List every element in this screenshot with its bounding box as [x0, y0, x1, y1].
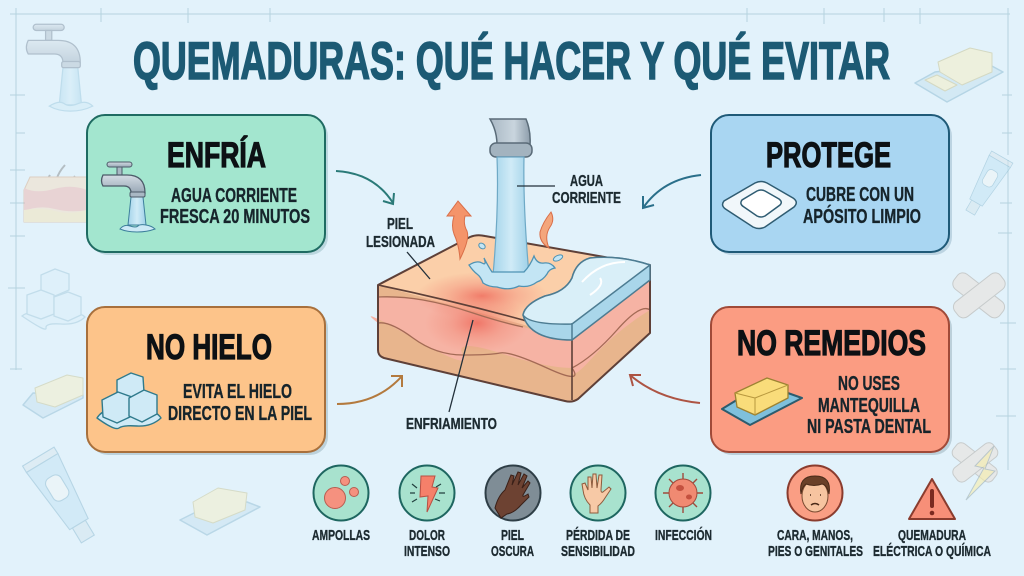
arrow: no hielo to skin — [337, 376, 402, 404]
label line: agua: AGUA — [570, 173, 603, 190]
gel layer — [523, 257, 650, 340]
background icon: butter bottom — [180, 488, 260, 535]
faucet spout — [490, 119, 532, 157]
icon: dressing — [723, 182, 796, 228]
label: sensibilidad: SENSIBILIDAD — [561, 544, 635, 560]
text: directo en la piel: DIRECTO EN LA PIEL — [168, 403, 312, 425]
arrow: enfría to skin — [336, 171, 394, 204]
icon: butter — [722, 378, 802, 425]
skin block — [371, 235, 650, 402]
background icon: lightning bolt — [966, 446, 995, 500]
heading: enfría: ENFRÍA — [167, 135, 266, 175]
panel: protege — [711, 115, 952, 255]
panel: enfría — [87, 115, 328, 255]
arrow: heat left — [447, 201, 471, 259]
label: infección: INFECCIÓN — [655, 526, 712, 544]
background icon: bandage upper — [950, 270, 1008, 321]
label line: corriente: CORRIENTE — [552, 190, 621, 207]
label line: piel: PIEL — [387, 216, 413, 233]
callout: agua corriente — [517, 173, 621, 207]
text: apósito limpio: APÓSITO LIMPIO — [803, 204, 921, 228]
text: cubre con un: CUBRE CON UN — [806, 184, 914, 206]
sign: dolor intenso — [400, 466, 454, 560]
icon: faucet — [102, 162, 155, 232]
sign: cara, manos, pies o genitales — [768, 466, 863, 560]
text: evita el hielo: EVITA EL HIELO — [183, 381, 292, 403]
background icon: toothpaste tube left — [23, 447, 104, 548]
label: cara, manos: CARA, MANOS, — [777, 528, 853, 544]
label: piel: PIEL — [501, 528, 524, 544]
sign: infección — [655, 466, 712, 544]
label line: enfriamiento: ENFRIAMIENTO — [406, 416, 497, 433]
callout: piel lesionada — [366, 216, 435, 279]
panel: no hielo — [87, 307, 328, 455]
sign: quemadura eléctrica o química — [873, 479, 991, 560]
central illustration: skin block with running water — [371, 119, 650, 402]
sign: ampollas — [312, 466, 370, 544]
text: mantequilla: MANTEQUILLA — [818, 395, 920, 417]
text: fresca 20 minutos: FRESCA 20 MINUTOS — [160, 206, 310, 228]
splash — [469, 256, 555, 289]
background icon: toothpaste tube right — [960, 151, 1013, 219]
callout: enfriamiento — [406, 320, 497, 433]
panel: no remedios — [711, 307, 952, 455]
label: oscura: OSCURA — [491, 544, 534, 560]
label: pies o genitales: PIES O GENITALES — [768, 544, 863, 560]
arrow: protege to skin — [643, 175, 701, 208]
sign: pérdida de sensibilidad — [561, 466, 635, 560]
text: agua corriente: AGUA CORRIENTE — [171, 185, 297, 207]
label: quemadura: QUEMADURA — [898, 528, 966, 544]
text: no uses: NO USES — [838, 373, 900, 395]
sign: piel oscura — [486, 466, 540, 560]
heading: no hielo: NO HIELO — [146, 328, 272, 367]
text: ni pasta dental: NI PASTA DENTAL — [807, 416, 931, 438]
background icon: faucet — [26, 24, 93, 111]
background icon: butter left — [23, 375, 83, 418]
arrow: heat right — [540, 212, 553, 248]
heading: no remedios: NO REMEDIOS — [737, 324, 926, 363]
water stream — [493, 157, 529, 280]
water drops — [478, 242, 564, 262]
icon: ice cubes — [97, 373, 161, 429]
label: dolor: DOLOR — [409, 528, 445, 544]
arrow: no remedios to skin — [630, 375, 700, 403]
background icon: skin section — [24, 165, 87, 222]
label: ampollas: AMPOLLAS — [312, 528, 370, 544]
label: intenso: INTENSO — [404, 544, 450, 560]
label line: lesionada: LESIONADA — [366, 234, 435, 251]
heading: protege: PROTEGE — [766, 136, 891, 175]
background icon: ice cubes — [22, 269, 85, 329]
label: pérdida de: PÉRDIDA DE — [566, 527, 630, 544]
background icon: butter top right — [915, 48, 1003, 102]
background icon: bandage lower — [950, 440, 1000, 484]
